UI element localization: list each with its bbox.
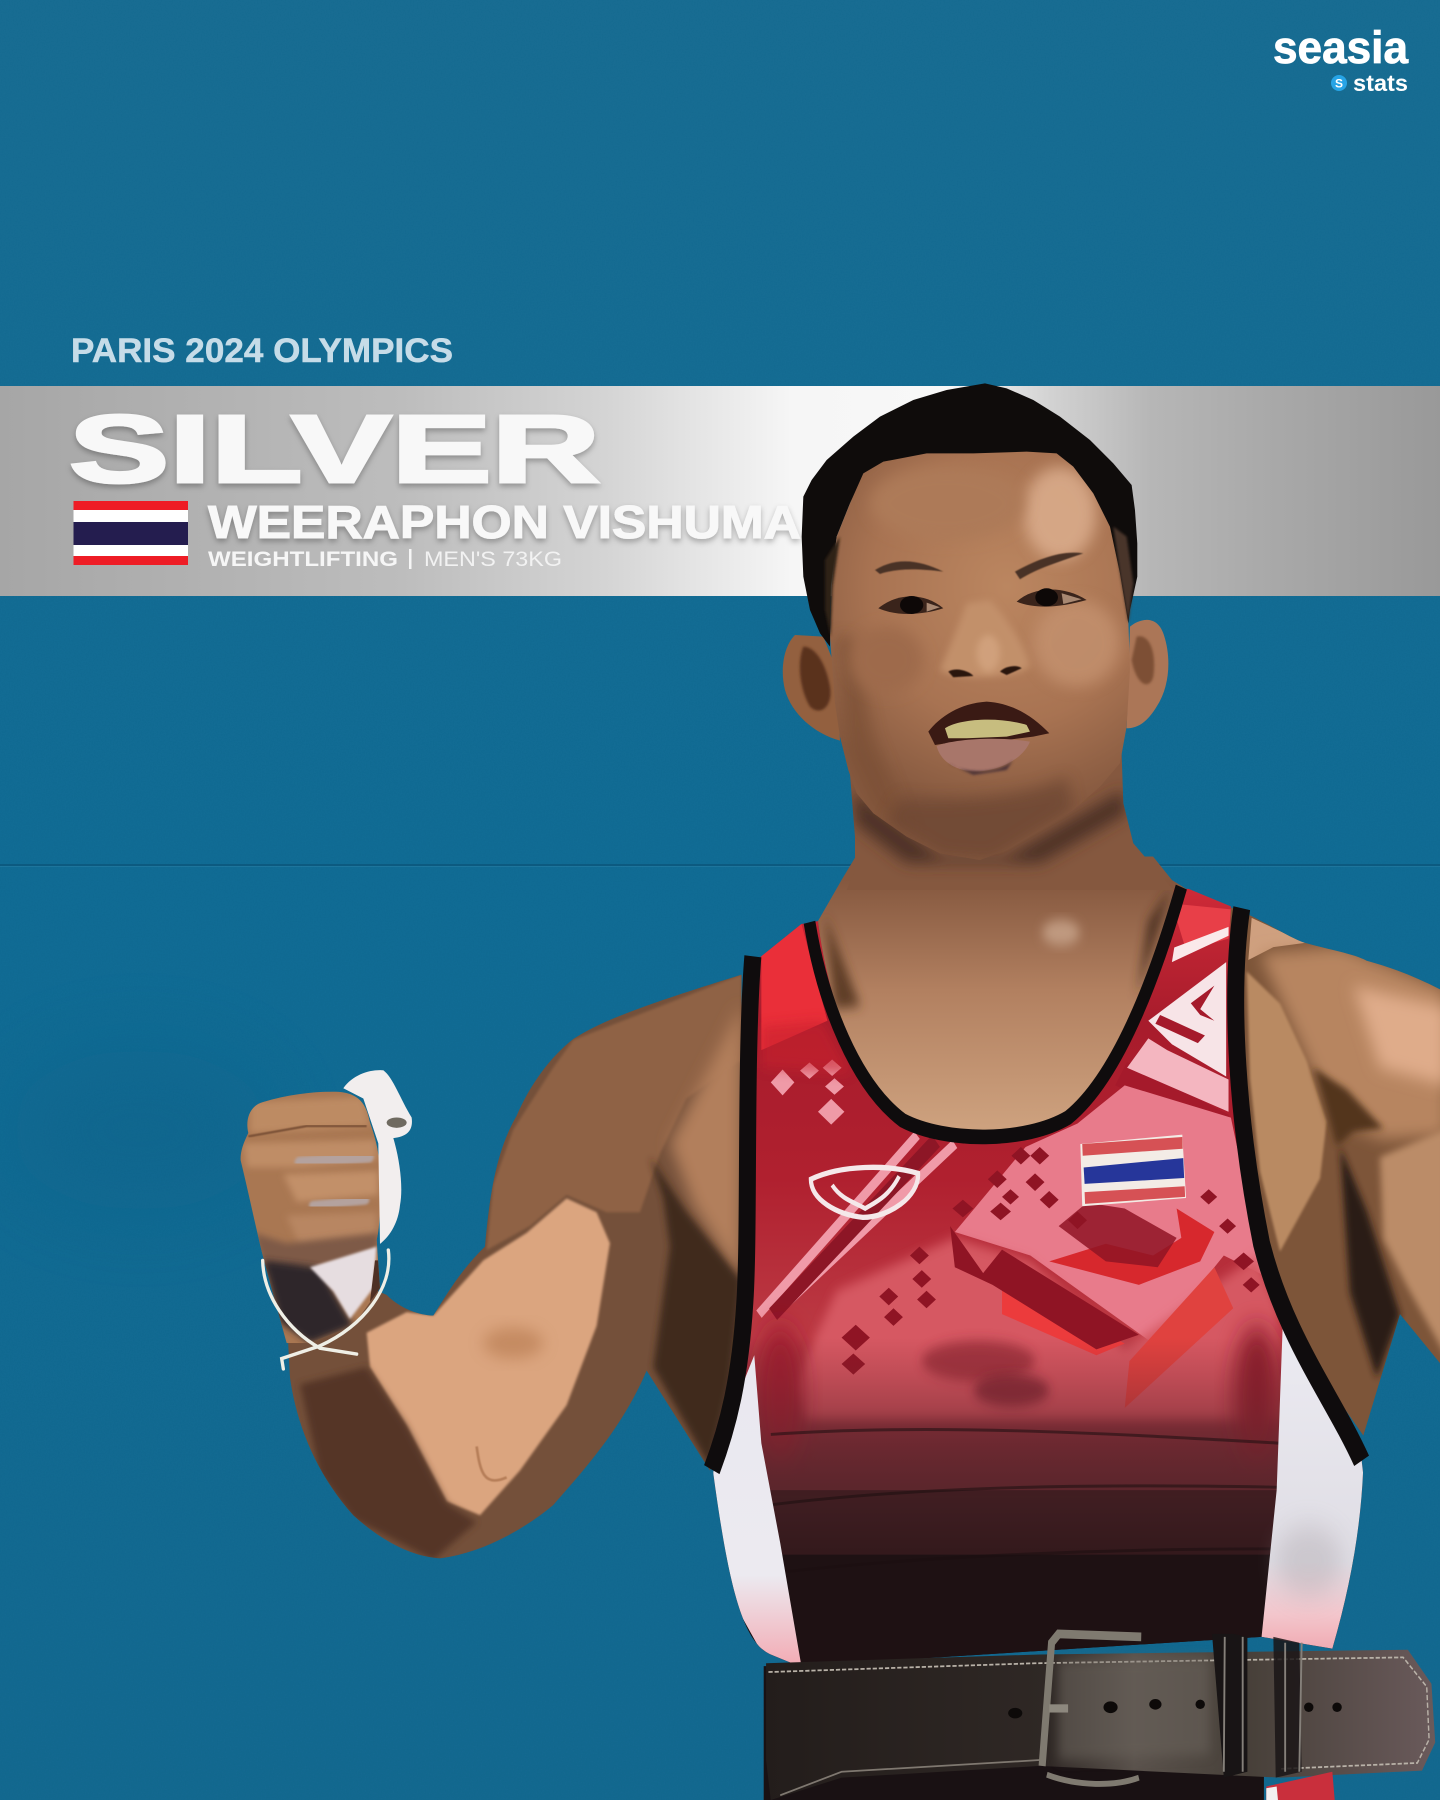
mouth (928, 702, 1049, 775)
red mottling on top left (761, 1021, 851, 1074)
chest skin (818, 856, 1186, 1130)
fist (237, 1088, 387, 1347)
right ear (1127, 620, 1168, 728)
leggings below belt (764, 1660, 1264, 1800)
singlet and belt (700, 880, 1435, 1800)
singlet straps (712, 887, 1362, 1470)
lower fade (713, 1349, 1363, 1496)
logo: seasia stats: stats (1353, 70, 1408, 96)
face shape (823, 443, 1137, 863)
eyebrows (875, 561, 943, 574)
hair (802, 383, 1137, 647)
red central print (1002, 1285, 1125, 1355)
lit bicep and forearm (367, 1198, 610, 1515)
wrist string (263, 1250, 389, 1369)
lifting belt (766, 1634, 1435, 1800)
pixel squares (842, 1147, 1260, 1375)
singlet body (700, 880, 1370, 1684)
chest flag patch (1080, 1135, 1186, 1206)
white side panels (709, 1355, 802, 1669)
icon: Thailand flag (74, 501, 188, 565)
right arm and shoulder (1227, 900, 1440, 1443)
belt buckle (1042, 1634, 1141, 1766)
sport and event: WEIGHTLIFTING (208, 547, 398, 571)
logo: seasia stats: seasia (1273, 22, 1409, 73)
left arm and fist (237, 971, 747, 1563)
athlete figure (237, 383, 1440, 1800)
logo: seasia stats: S (1335, 76, 1343, 90)
sport and event: MEN'S 73KG (424, 547, 562, 571)
left eye (878, 596, 943, 614)
finger tape (343, 1070, 412, 1244)
event heading: PARIS 2024 OLYMPICS (71, 332, 453, 370)
belt holes (1008, 1699, 1342, 1718)
head and face (783, 383, 1168, 863)
pink central print (955, 1085, 1271, 1343)
brand logo (811, 1167, 918, 1217)
belt loops (1212, 1634, 1247, 1778)
medal title: SILVER (69, 396, 600, 503)
right eye (1017, 588, 1087, 607)
neck (850, 754, 1144, 870)
belt wear (1059, 1657, 1210, 1760)
pink diagonal stripes (759, 1135, 955, 1314)
left ear (783, 635, 840, 741)
sport and event (208, 547, 562, 571)
lower blotches (922, 1341, 1035, 1382)
logo: seasia stats (1273, 22, 1409, 96)
nose (940, 600, 1030, 677)
silver banner (0, 386, 1440, 596)
athlete name: WEERAPHON VISHUMA (208, 496, 801, 548)
arm (280, 971, 747, 1563)
